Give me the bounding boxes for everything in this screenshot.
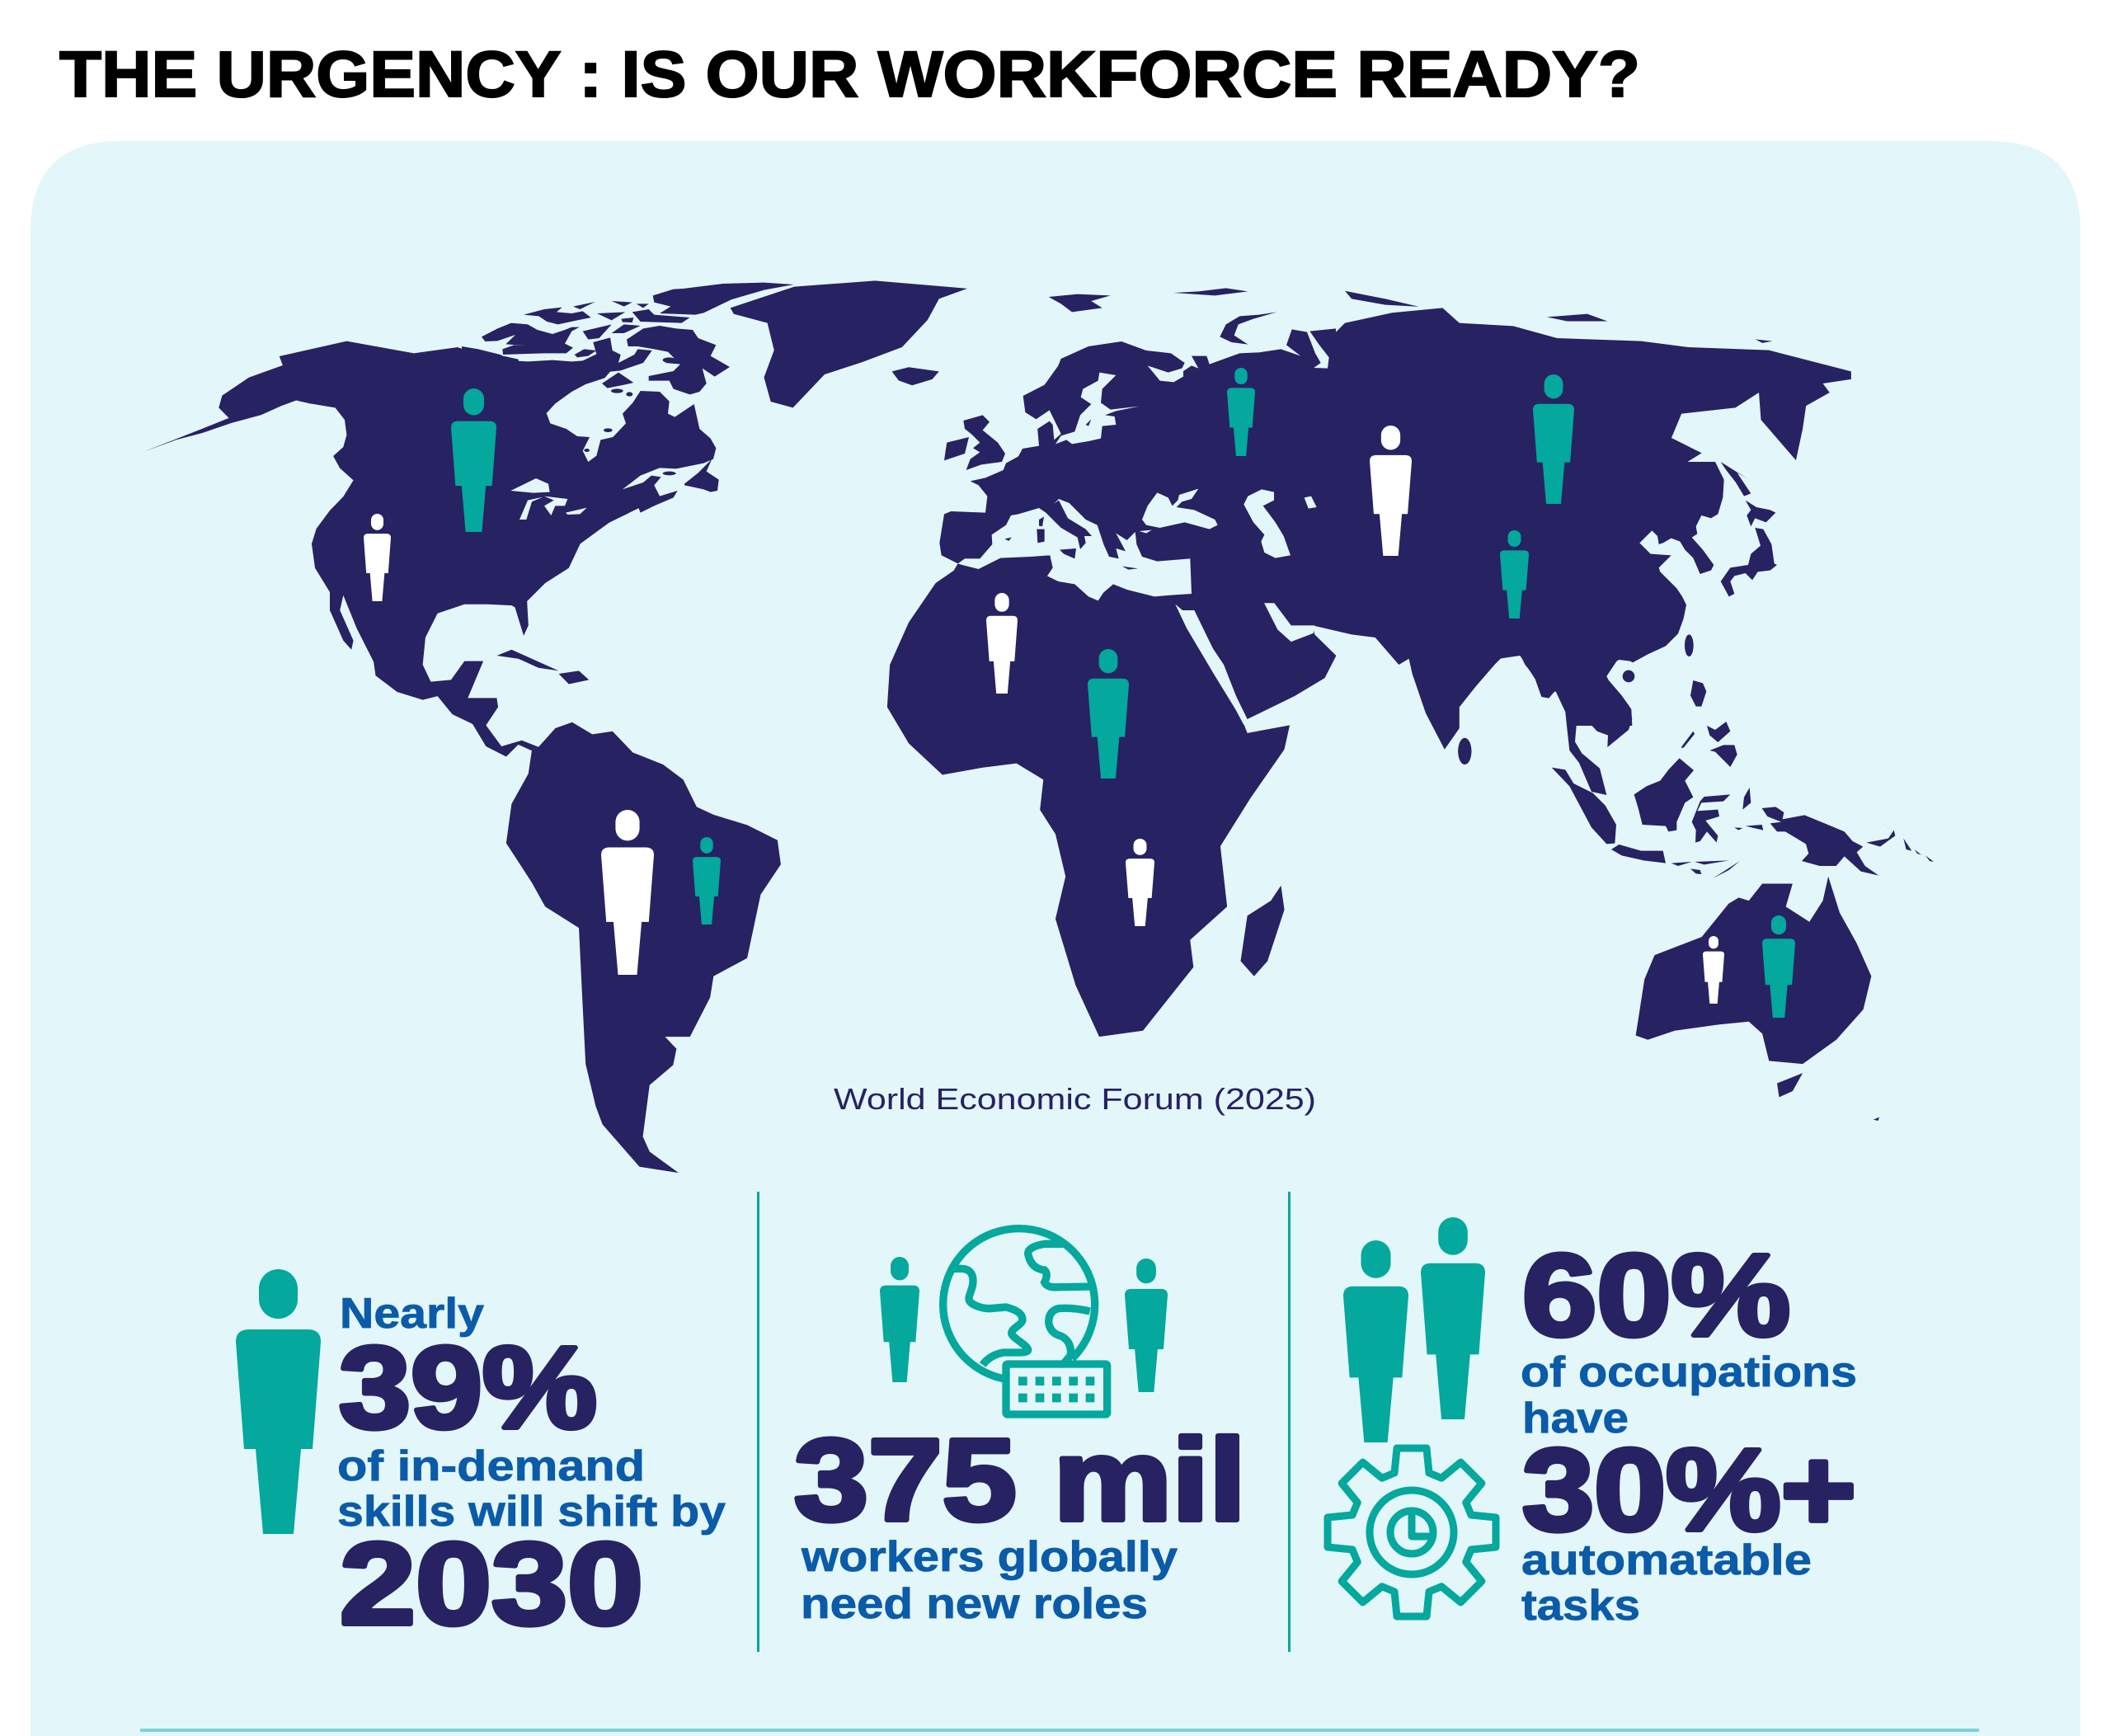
icon: gear with clock: [1328, 1448, 1496, 1616]
person: Siberia teal: [1533, 374, 1574, 504]
icon: person left: [880, 1257, 919, 1382]
world map: [143, 280, 1934, 1173]
text: of occupations: of occupations: [1521, 1348, 1857, 1396]
stat: 375 mil: [794, 1229, 1246, 1628]
icon: person left: [1343, 1240, 1408, 1442]
text: skills will shift by: skills will shift by: [337, 1488, 726, 1536]
title: THE URGENCY : IS OUR WORKFORCE READY?: [59, 37, 1640, 111]
text: need new roles: need new roles: [801, 1580, 1148, 1628]
divider left: [757, 1192, 759, 1652]
person: Southern Africa white: [1126, 839, 1154, 926]
people on map: [364, 368, 1795, 1018]
text: have: have: [1522, 1395, 1629, 1442]
text: Nearly: Nearly: [340, 1290, 484, 1338]
person: China teal: [1500, 530, 1529, 619]
person: North America teal: [451, 388, 496, 532]
bottom rule: [140, 1729, 1979, 1732]
icon: person: [236, 1269, 321, 1534]
icon: globe with keyboard: [943, 1229, 1107, 1414]
text: workers globally: workers globally: [801, 1533, 1178, 1581]
person: Central Asia white: [1370, 426, 1412, 556]
text: automatable: automatable: [1521, 1536, 1812, 1584]
person: South America white: [601, 810, 654, 975]
text: tasks: tasks: [1521, 1582, 1640, 1630]
number: 39%: 39%: [339, 1322, 597, 1452]
person: North Africa white: [986, 593, 1018, 694]
person: Central Africa teal: [1088, 649, 1129, 779]
number: 60%: 60%: [1522, 1230, 1790, 1360]
person: Australia white: [1703, 936, 1724, 1004]
source caption: World Economic Forum (2025): [834, 1082, 1316, 1116]
stat: 39 percent: [236, 1269, 726, 1649]
stat: 60 percent and 30 percent: [1328, 1217, 1857, 1630]
text: of in-demand: of in-demand: [337, 1442, 645, 1490]
icon: person right: [1125, 1258, 1168, 1392]
person: Australia teal: [1762, 915, 1795, 1018]
number: 30%+: 30%+: [1522, 1424, 1856, 1555]
number: 375 mil: 375 mil: [794, 1414, 1246, 1545]
divider right: [1288, 1192, 1291, 1652]
number: 2030: 2030: [340, 1518, 643, 1649]
person: Russia teal: [1227, 368, 1255, 456]
icon: person right: [1421, 1217, 1485, 1419]
person: Brazil teal: [693, 837, 721, 924]
person: western US white: [364, 514, 391, 601]
